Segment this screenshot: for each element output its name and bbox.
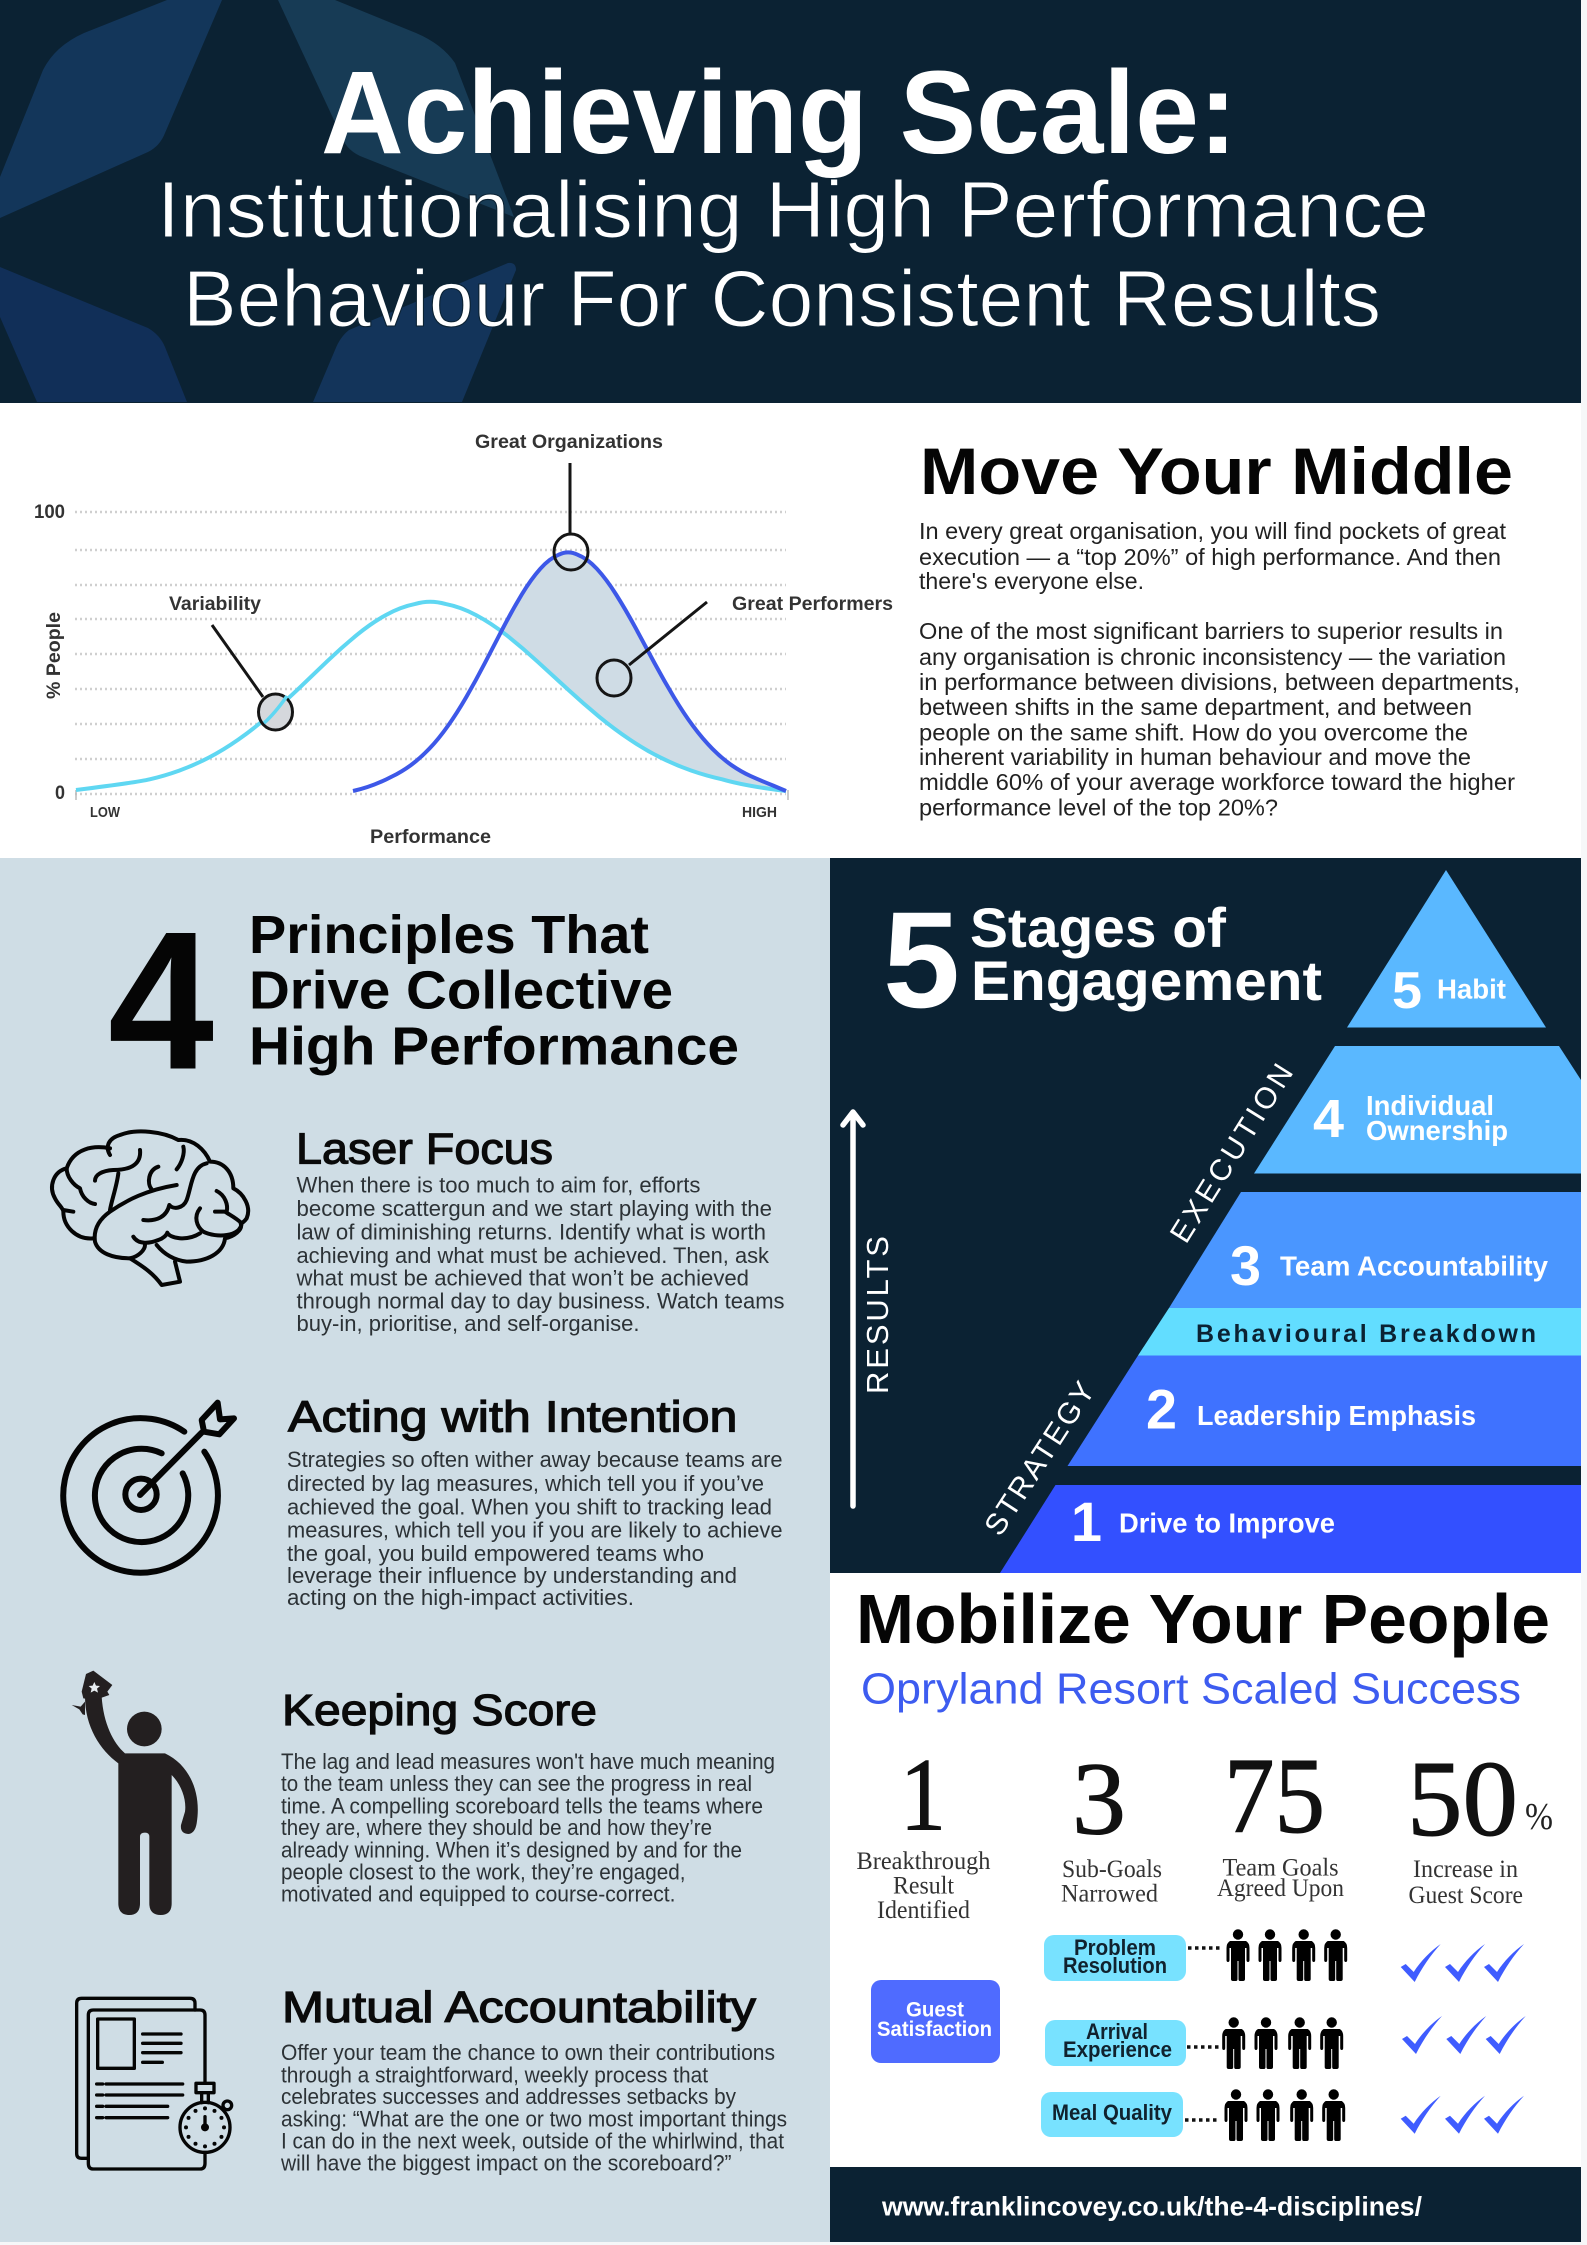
row: meal quality	[1041, 2089, 1524, 2141]
heading: principles: High Performance	[249, 1016, 739, 1076]
panel: mobilize your people	[830, 1573, 1581, 2167]
principle: acting with intention: Strategies so often wither away because teams are	[287, 1447, 782, 1472]
tier 5: habit: Habit	[1437, 974, 1506, 1005]
heading: principles: Drive Collective	[249, 961, 673, 1021]
stat: 50% guest score: 50	[1407, 1740, 1518, 1859]
principle: laser focus: become scattergun and we start playing with the	[296, 1196, 772, 1221]
row: arrival experience: Experience	[1063, 2037, 1172, 2062]
panel: 5 stages of engagement	[830, 858, 1581, 1574]
principle: keeping score: motivated and equipped to course-correct.	[281, 1882, 676, 1907]
axis labels: HIGH	[742, 804, 777, 821]
row: arrival experience: Arrival	[1086, 2019, 1148, 2044]
stat: 1 breakthrough result: Breakthrough	[856, 1848, 991, 1875]
principle: mutual accountability: I can do in the next week, outside of the whirlwind, that	[281, 2128, 785, 2154]
axis labels	[34, 432, 893, 848]
stat: 3 sub-goals: 3	[1072, 1742, 1126, 1856]
principle: mutual accountability: asking: “What are the one or two most important things	[281, 2107, 787, 2132]
stat: 75 team goals: 75	[1224, 1737, 1325, 1856]
principle: acting with intention: Acting with Intention	[288, 1392, 738, 1441]
row: meal quality: Meal Quality	[1052, 2100, 1173, 2125]
tier 1: drive to improve	[1000, 1485, 1581, 1573]
heading: 5 stages: Stages of	[970, 896, 1226, 959]
principle: laser focus: achieving and what must be achieved. Then, ask	[296, 1243, 770, 1268]
subtitle	[157, 165, 1429, 343]
background star shapes	[0, 0, 516, 402]
tier 2: leadership emphasis	[1068, 1356, 1581, 1466]
band: behavioural breakdown	[1138, 1308, 1581, 1356]
tier 2: leadership emphasis: 2	[1146, 1377, 1177, 1440]
principle: keeping score: Keeping Score	[282, 1686, 597, 1735]
text block: move your middle: inherent variability in human behaviour and move the	[919, 744, 1471, 770]
principle: keeping score: already winning. When it’s designed by and for the	[281, 1838, 742, 1862]
label: execution: EXECUTION	[1164, 1058, 1300, 1249]
principle: acting with intention: achieved the goal. When you shift to tracking lead	[287, 1494, 772, 1520]
tier 5: habit: 5	[1392, 962, 1422, 1020]
box: guest satisfaction	[871, 1980, 1000, 2063]
principle: acting with intention: the goal, you build empowered teams who	[287, 1541, 704, 1566]
icon: brain	[52, 1131, 248, 1285]
axis labels: 0	[55, 783, 65, 804]
heading: 5 stages: 5	[883, 884, 960, 1037]
principle: mutual accountability: through a straightforward, weekly process that	[281, 2062, 709, 2088]
tier 4: individual ownership	[1254, 1046, 1581, 1174]
average curve	[76, 602, 786, 791]
principle: acting with intention: directed by lag measures, which tell you if you’ve	[287, 1471, 764, 1496]
footer: website url: www.franklincovey.co.uk/the-4-disciplines/	[881, 2192, 1422, 2222]
text block: move your middle: any organisation is chronic inconsistency — the variation	[919, 644, 1506, 670]
callouts	[212, 463, 707, 730]
principle: keeping score: people closest to the work, they’re engaged,	[281, 1859, 686, 1884]
tier 3: team accountability	[1169, 1192, 1581, 1308]
heading number: 4: 4	[108, 890, 214, 1110]
subtitle: Behaviour For Consistent Results	[183, 254, 1381, 343]
principle: keeping score	[281, 1686, 775, 1907]
stat: 3 sub-goals: Sub-Goals	[1062, 1856, 1162, 1883]
tier 2: leadership emphasis: Leadership Emphasis	[1197, 1400, 1476, 1431]
principle: mutual accountability: will have the biggest impact on the scoreboard?”	[280, 2151, 732, 2176]
principle: laser focus	[296, 1125, 784, 1336]
axis labels: % People	[44, 612, 65, 699]
text block: move your middle: between shifts in the same department, and between	[919, 694, 1472, 720]
row: problem resolution: Resolution	[1063, 1953, 1167, 1978]
text block: move your middle: One of the most significant barriers to superior results in	[919, 618, 1503, 644]
icon: documents and stopwatch	[77, 1998, 232, 2169]
icon: target with arrow	[63, 1403, 234, 1573]
subheading: opryland: Opryland Resort Scaled Success	[861, 1664, 1521, 1714]
tier 3: team accountability: Team Accountability	[1280, 1250, 1548, 1282]
stat: 3 sub-goals	[1061, 1742, 1162, 1908]
stat: 50% guest score	[1407, 1740, 1553, 1909]
principle: laser focus: law of diminishing returns. Identify what is worth	[296, 1220, 766, 1244]
panel: header banner	[0, 0, 1581, 403]
principle: laser focus: When there is too much to aim for, efforts	[296, 1173, 700, 1198]
stat: 1 breakthrough result	[856, 1738, 991, 1924]
tier 1: drive to improve: Drive to Improve	[1119, 1508, 1335, 1539]
axis labels: Performance	[370, 827, 491, 848]
box: guest satisfaction: Satisfaction	[877, 2018, 992, 2041]
principle: mutual accountability: Mutual Accountability	[282, 1983, 756, 2032]
chart: performance distribution curves	[34, 432, 893, 848]
tier 1: drive to improve: 1	[1071, 1490, 1102, 1553]
axis labels: Great Organizations	[475, 432, 663, 453]
axis labels: LOW	[90, 804, 121, 821]
stat: 3 sub-goals: Narrowed	[1061, 1880, 1158, 1908]
principle: acting with intention: leverage their influence by understanding and	[287, 1563, 737, 1588]
band: behavioural breakdown: Behavioural Breakdown	[1196, 1320, 1536, 1348]
principle: mutual accountability: celebrates successes and addresses setbacks by	[281, 2084, 737, 2109]
stat: 50% guest score: Increase in	[1413, 1856, 1518, 1883]
heading: principles	[249, 905, 739, 1076]
axis labels: Variability	[169, 594, 261, 615]
principle: keeping score: time. A compelling scoreboard tells the teams where	[281, 1793, 763, 1818]
arrow: results: RESULTS	[860, 1236, 895, 1394]
stat: 1 breakthrough result: 1	[900, 1738, 946, 1853]
principle: keeping score: they are, where they should be and how they’re	[281, 1815, 712, 1840]
great performer curve	[353, 552, 786, 791]
stat: 75 team goals	[1217, 1737, 1344, 1902]
icon: person raising trophy	[72, 1671, 198, 1915]
principle: laser focus: through normal day to day business. Watch teams	[296, 1289, 784, 1314]
principle: laser focus: buy-in, prioritise, and self-organise.	[296, 1311, 640, 1336]
tier 4: individual ownership: Ownership	[1366, 1115, 1508, 1146]
text block: move your middle: execution — a “top 20%” of high performance. And then	[919, 544, 1501, 570]
heading: move your middle: Move Your Middle	[920, 434, 1513, 508]
principle: laser focus: Laser Focus	[296, 1125, 553, 1174]
tier 5: habit	[1347, 870, 1546, 1028]
principle: laser focus: what must be achieved that won’t be achieved	[296, 1266, 749, 1290]
principle: acting with intention	[287, 1392, 782, 1610]
stat: 1 breakthrough result: Identified	[877, 1897, 970, 1924]
principle: keeping score: The lag and lead measures won't have much meaning	[281, 1749, 775, 1774]
text block: move your middle: performance level of the top 20%?	[919, 794, 1278, 820]
heading: 5 stages	[883, 884, 1322, 1037]
tier 4: individual ownership: 4	[1313, 1089, 1344, 1149]
text block: move your middle: In every great organisation, you will find pockets of great	[919, 518, 1506, 544]
axis labels: 100	[34, 502, 65, 523]
text block: move your middle: people on the same shift. How do you overcome the	[919, 720, 1468, 746]
panel: move your middle	[0, 403, 1581, 858]
text block: move your middle: in performance between divisions, between departments,	[919, 669, 1520, 695]
stat: 50% guest score: Guest Score	[1408, 1882, 1523, 1909]
stat: 75 team goals: Team Goals	[1222, 1855, 1338, 1882]
box: guest satisfaction: Guest	[906, 1998, 964, 2021]
principle: keeping score: to the team unless they can see the progress in real	[281, 1771, 752, 1796]
arrow: results	[843, 1112, 895, 1506]
principle: mutual accountability: Offer your team the chance to own their contributions	[281, 2040, 775, 2065]
text block: move your middle: middle 60% of your average workforce toward the higher	[919, 769, 1515, 795]
label: strategy: STRATEGY	[978, 1376, 1102, 1542]
heading: 5 stages: Engagement	[971, 949, 1322, 1012]
footer: website url	[830, 2167, 1581, 2242]
heading: mobilize your people: Mobilize Your People	[856, 1580, 1550, 1658]
principle: acting with intention: measures, which tell you if you are likely to achieve	[287, 1518, 782, 1543]
tier 4: individual ownership: Individual	[1366, 1090, 1494, 1121]
text block: move your middle	[919, 518, 1520, 820]
principle: acting with intention: acting on the high-impact activities.	[287, 1585, 634, 1610]
stat: 1 breakthrough result: Result	[893, 1873, 954, 1900]
stat: 50% guest score: %	[1525, 1796, 1553, 1838]
title: Achieving Scale:	[321, 47, 1237, 179]
row: arrival experience	[1045, 2016, 1526, 2069]
text block: move your middle: there's everyone else.	[919, 568, 1144, 594]
shaded area	[501, 552, 786, 791]
stat: 75 team goals: Agreed Upon	[1217, 1875, 1344, 1902]
heading: principles: Principles That	[249, 905, 649, 965]
tier 3: team accountability: 3	[1230, 1234, 1261, 1297]
panel: 4 principles	[0, 858, 830, 2242]
axis labels: Great Performers	[732, 594, 893, 615]
principle: mutual accountability	[280, 1983, 787, 2176]
subtitle: Institutionalising High Performance	[157, 165, 1429, 254]
row: problem resolution: Problem	[1074, 1935, 1156, 1960]
row: problem resolution	[1044, 1929, 1524, 1982]
